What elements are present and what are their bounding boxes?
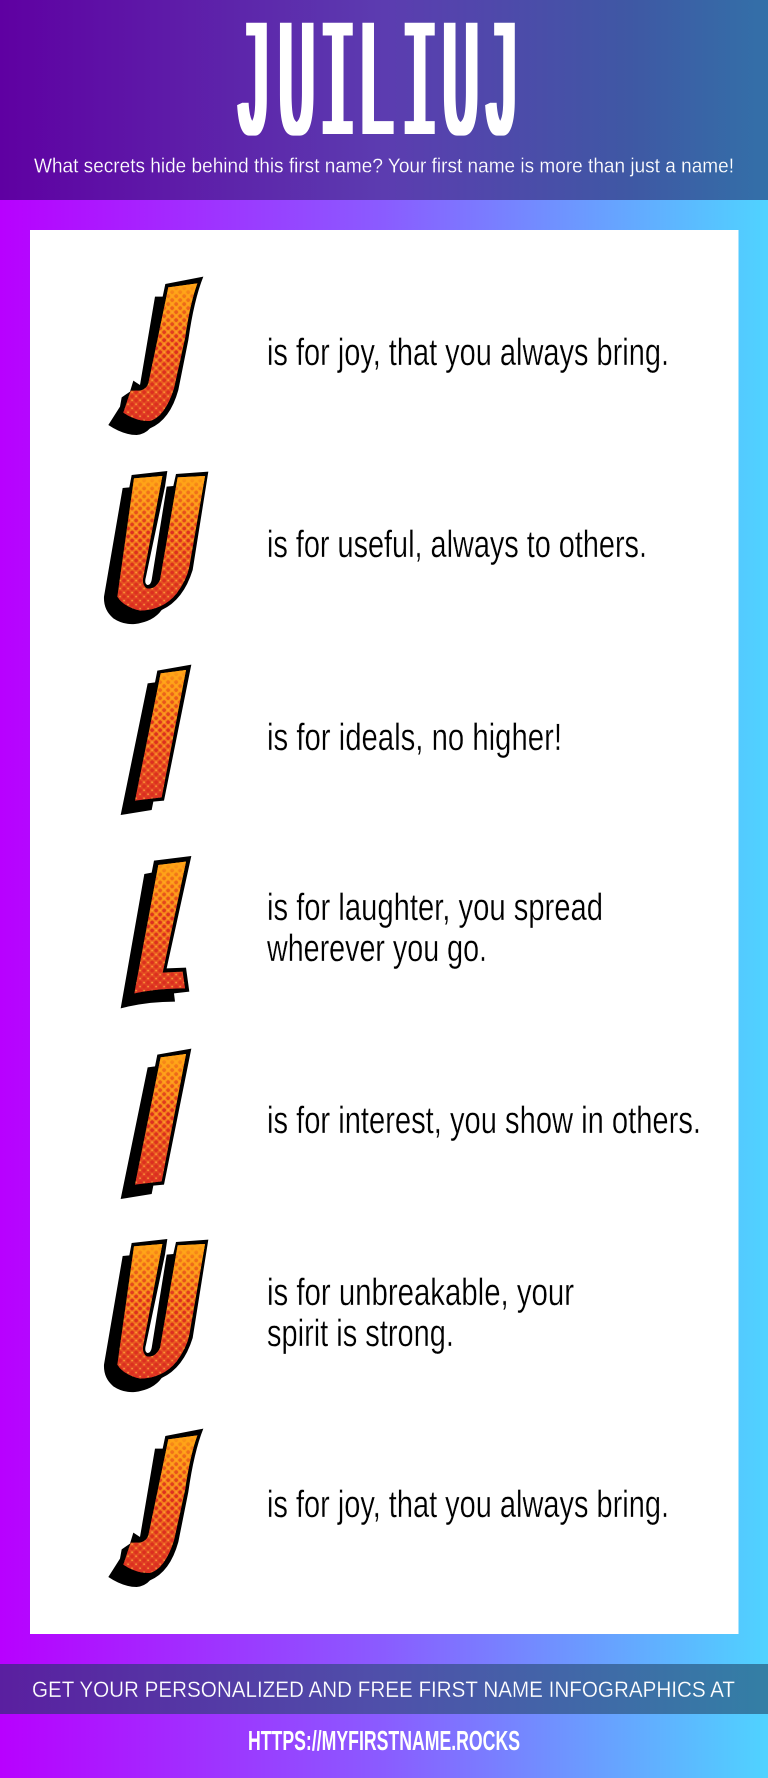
subtitle: What secrets hide behind this first name? Your first name is more than just a name! xyxy=(34,154,734,178)
text: L line: wherever you go. xyxy=(266,928,487,970)
footer call-to-action band xyxy=(0,1664,768,1714)
header band xyxy=(0,0,768,200)
icon: comic letter I xyxy=(121,1049,191,1199)
icon: comic letter I xyxy=(121,665,191,815)
white content panel xyxy=(30,230,738,1634)
icon: comic letter L xyxy=(121,856,191,1008)
icon: comic letter U xyxy=(104,1239,208,1392)
text: U line xyxy=(267,1272,574,1355)
icon: comic letter U xyxy=(104,471,208,624)
footer url: HTTPS://MYFIRSTNAME.ROCKS xyxy=(248,1725,520,1756)
text: U line: spirit is strong. xyxy=(267,1313,454,1355)
text: L line xyxy=(266,887,603,970)
text: I line: is for ideals, no higher! xyxy=(267,717,562,759)
text: L line: is for laughter, you spread xyxy=(267,887,603,929)
icon: comic letter J xyxy=(108,1429,203,1587)
icon: comic letter J xyxy=(108,277,203,435)
text: U line: is for unbreakable, your xyxy=(267,1272,574,1314)
text: U line: is for useful, always to others. xyxy=(267,524,647,566)
